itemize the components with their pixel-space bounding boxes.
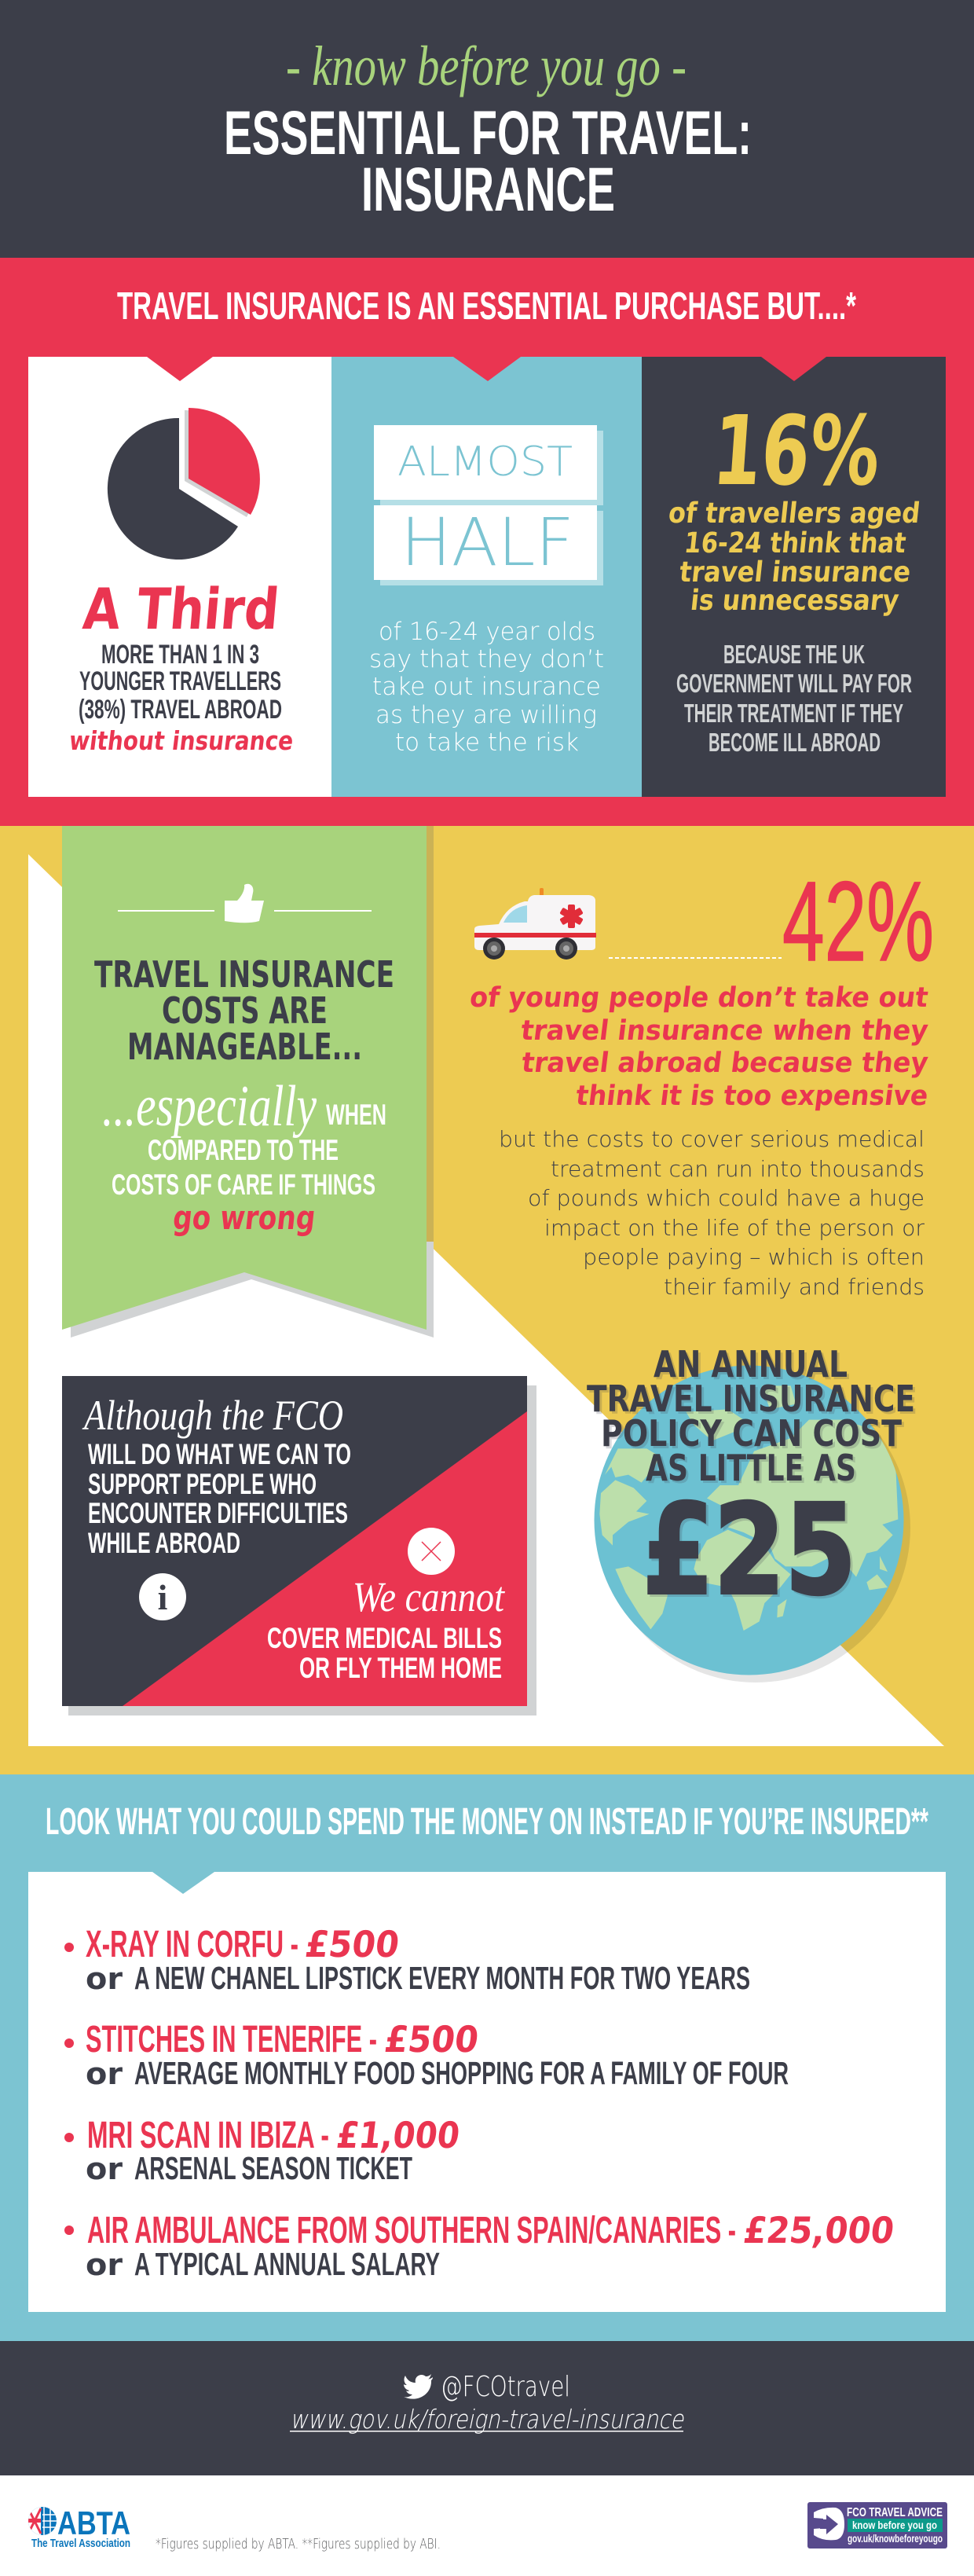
red statement (468, 982, 930, 1112)
icon: ambulance (474, 888, 596, 960)
almost half label: ALMOST (397, 439, 573, 486)
a third description (79, 640, 282, 725)
panel: essential purchase statistics (0, 258, 974, 826)
especially text (102, 1074, 386, 1201)
medical costs paragraph (499, 1126, 925, 1300)
row: air ambulance (64, 2209, 896, 2282)
medical costs paragraph: treatment can run into thousands (551, 1156, 925, 1182)
panel: yellow costs section (0, 826, 974, 1774)
card: almost half (331, 357, 642, 797)
row: air ambulance: £25,000 (741, 2209, 896, 2251)
almost half description: as they are willing (375, 701, 597, 729)
yellow statement (667, 497, 921, 617)
manageable heading (94, 953, 394, 1068)
logo: FCO travel advice (807, 2502, 947, 2548)
although the FCO text: SUPPORT PEOPLE WHO (88, 1468, 317, 1500)
medical costs paragraph: people paying – which is often (583, 1244, 925, 1270)
medical costs paragraph: of pounds which could have a huge (528, 1185, 925, 1211)
yellow statement: travel insurance (678, 556, 912, 589)
row: x-ray (64, 1923, 750, 1996)
annual cost text: AS LITTLE AS (646, 1447, 856, 1489)
logo: FCO travel advice: FCO TRAVEL ADVICE (847, 2506, 943, 2519)
icon: twitter bird (404, 2374, 433, 2399)
icon: info (139, 1573, 186, 1620)
yellow statement: is unnecessary (689, 584, 900, 617)
annual cost text: POLICY CAN COST (601, 1412, 903, 1455)
tagline: know before you go: - know before you go - (286, 35, 687, 97)
medical costs paragraph: impact on the life of the person or (544, 1215, 925, 1241)
especially text: COMPARED TO THE (148, 1134, 339, 1166)
especially text: WHEN (326, 1099, 386, 1131)
row: x-ray: X-RAY IN CORFU - (86, 1924, 298, 1965)
a third description: MORE THAN 1 IN 3 (101, 640, 259, 670)
logo: ABTA: The Travel Association (31, 2537, 130, 2550)
we cannot text: OR FLY THEM HOME (299, 1652, 502, 1684)
a third description: YOUNGER TRAVELLERS (79, 666, 281, 696)
16 percent figure: 16% (709, 395, 884, 507)
row: stitches (64, 2018, 789, 2091)
row: x-ray: or (86, 1961, 123, 1996)
logo: ABTA (28, 2507, 130, 2547)
almost half label: HALF (401, 504, 574, 581)
website link: www.gov.uk/foreign-travel-insurance (290, 2404, 684, 2435)
government explanation: BECAUSE THE UK (723, 640, 865, 669)
icon: cross (408, 1528, 455, 1575)
annual cost text: AN ANNUAL (654, 1343, 848, 1385)
almost half description: say that they don’t (369, 645, 604, 673)
dashed connector (609, 957, 782, 959)
red statement: of young people don’t take out (468, 982, 930, 1014)
almost half description (369, 618, 604, 757)
header panel (0, 0, 974, 258)
annual cost text (587, 1343, 915, 1623)
medical costs paragraph: but the costs to cover serious medical (499, 1126, 925, 1152)
without insurance: without insurance (68, 725, 295, 756)
25 pounds figure: £25 (643, 1478, 856, 1623)
go wrong: go wrong (171, 1198, 317, 1237)
almost half description: to take the risk (395, 728, 579, 757)
although the FCO text: ENCOUNTER DIFFICULTIES (88, 1497, 348, 1529)
card: a third (28, 357, 331, 797)
row: mri scan (64, 2114, 462, 2186)
icon: thumbs up (118, 884, 372, 923)
we cannot text: COVER MEDICAL BILLS (267, 1622, 502, 1654)
manageable heading: MANAGEABLE... (127, 1026, 362, 1068)
a third description: (38%) TRAVEL ABROAD (79, 695, 282, 725)
almost half label (374, 425, 603, 585)
almost half description: of 16-24 year olds (379, 618, 595, 646)
card: 16 percent (642, 357, 946, 797)
row: air ambulance: or (86, 2248, 123, 2282)
logo: FCO travel advice: know before you go (852, 2519, 937, 2531)
list card (28, 1872, 946, 2312)
row: mri scan: MRI SCAN IN IBIZA - (87, 2115, 329, 2156)
although the FCO text: Although the FCO (82, 1392, 343, 1439)
row: stitches: or (86, 2057, 123, 2091)
although the FCO text: WHILE ABROAD (88, 1527, 240, 1559)
especially text: COSTS OF CARE IF THINGS (112, 1169, 375, 1201)
government explanation (676, 640, 912, 757)
row: stitches: £500 (383, 2018, 481, 2060)
twitter handle: @FCOtravel (441, 2371, 570, 2403)
although the FCO text: WILL DO WHAT WE CAN TO (88, 1438, 351, 1470)
a third heading: A Third (80, 577, 282, 643)
manageable heading: TRAVEL INSURANCE (94, 953, 394, 996)
title: INSURANCE (361, 154, 615, 224)
green ribbon (62, 826, 434, 1338)
pie chart (108, 408, 260, 560)
especially text: ...especially (102, 1074, 317, 1139)
almost half description: take out insurance (372, 673, 601, 701)
globe (594, 1366, 910, 1682)
yellow statement: of travellers aged (667, 497, 921, 530)
FCO split panel (62, 1376, 536, 1715)
title (224, 97, 752, 224)
red statement: think it is too expensive (574, 1080, 930, 1112)
logo: ABTA: ABTA (57, 2504, 130, 2541)
row: stitches: STITCHES IN TENERIFE - (86, 2019, 377, 2060)
red statement: travel insurance when they (519, 1015, 930, 1047)
red statement: travel abroad because they (520, 1047, 930, 1079)
medical costs paragraph: their family and friends (664, 1274, 925, 1300)
footnote: *Figures supplied by ABTA. **Figures supplied by ABI. (156, 2536, 441, 2552)
row: mri scan: £1,000 (335, 2114, 462, 2156)
icon: info: i (158, 1577, 168, 1617)
row: mri scan: ARSENAL SEASON TICKET (134, 2150, 412, 2186)
row: mri scan: or (86, 2152, 123, 2186)
although the FCO text (82, 1392, 351, 1559)
manageable heading: COSTS ARE (162, 989, 328, 1032)
we cannot text (267, 1573, 506, 1684)
yellow statement: 16-24 think that (683, 527, 907, 560)
row: x-ray: £500 (303, 1923, 401, 1965)
row: air ambulance: A TYPICAL ANNUAL SALARY (134, 2246, 440, 2282)
footer contact panel (0, 2341, 974, 2475)
we cannot text: We cannot (353, 1573, 506, 1620)
panel: what you could spend (0, 1774, 974, 2341)
icon: suitcase arrow (814, 2508, 844, 2540)
